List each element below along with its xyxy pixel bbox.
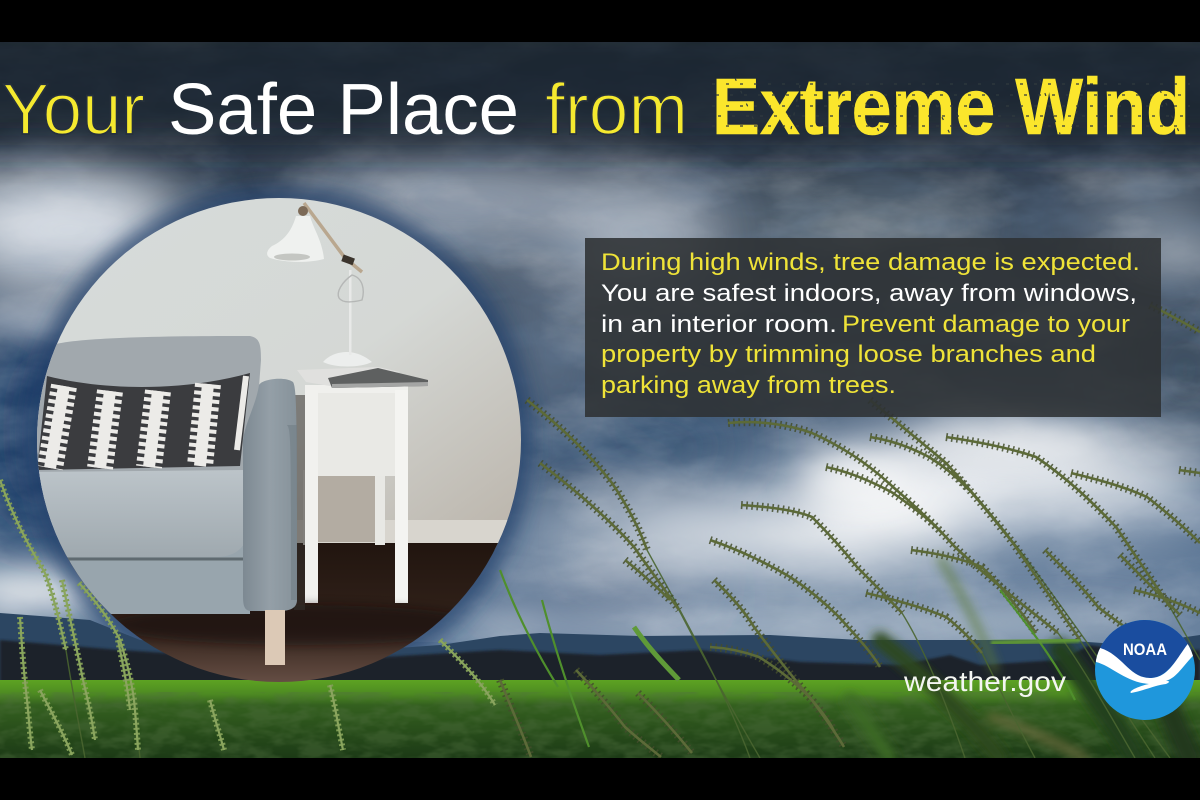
logo white bird: [1096, 644, 1193, 693]
panel text: line 3 yellow: Prevent damage to your: [842, 311, 1130, 338]
wind-blown grass: [0, 305, 1200, 758]
weather.gov link text: weather.gov: [903, 666, 1066, 697]
text panel: [585, 238, 1161, 417]
storm clouds: [0, 42, 1200, 642]
mountain treeline: [0, 638, 1200, 680]
grass stems: [66, 463, 1200, 758]
title: [2, 62, 1190, 151]
sofa arm front edge shade: [287, 425, 297, 600]
books on table: [297, 367, 428, 388]
title words: Safe Place: Safe Place: [168, 70, 519, 150]
sofa shadow on floor: [110, 605, 490, 645]
panel text: line 1: During high winds, tree damage is expected.: [601, 249, 1140, 276]
table lamp: [267, 203, 372, 366]
logo wordmark: NOAA: [1123, 641, 1167, 659]
striped pillow: [37, 373, 250, 470]
field texture: [0, 692, 1200, 758]
grass seed head barbs: [500, 305, 1200, 757]
top black band: [0, 0, 1200, 42]
title backdrop shade: [0, 20, 1200, 145]
sofa base: [60, 543, 250, 614]
title distress specks: [712, 78, 1190, 134]
bright wide blade: [634, 627, 679, 680]
green blades: [500, 570, 1075, 747]
circle halo: [25, 186, 533, 694]
bottom black band: [0, 758, 1200, 800]
table shadow beside sofa: [294, 395, 305, 610]
blurred foreground blade: [991, 640, 1080, 643]
distant mountains: [0, 613, 1200, 680]
panel text: line 3 white: in an interior room.: [601, 311, 837, 338]
panel text: line 2: You are safest indoors, away from windows,: [601, 280, 1137, 307]
round photo: living room: [30, 190, 530, 688]
sofa arm: [243, 379, 297, 611]
blurred foreground grass: [850, 558, 1190, 758]
wood floor: [60, 543, 498, 682]
bright cloud masses: [0, 174, 1200, 573]
near-left seed spines: [0, 480, 495, 755]
title word: Your: Your: [2, 70, 145, 150]
grass seed head spines: [500, 305, 1200, 757]
panel text: line 5: parking away from trees.: [601, 372, 896, 399]
panel text: line 4: property by trimming loose branches and: [601, 341, 1096, 368]
sofa leg: [265, 610, 285, 665]
baseboard: [318, 520, 508, 543]
sofa seat crease shadow: [60, 558, 246, 560]
NOAA logo: [1095, 620, 1195, 720]
wall: [30, 190, 530, 550]
near-left seed barbs: [0, 480, 495, 755]
green field: [0, 680, 1200, 758]
title word: from: from: [545, 70, 688, 150]
logo upper dark band: [1100, 620, 1188, 678]
side table: [303, 385, 408, 603]
sofa back cushion: [30, 336, 261, 480]
sofa seat cushion: [30, 470, 247, 557]
